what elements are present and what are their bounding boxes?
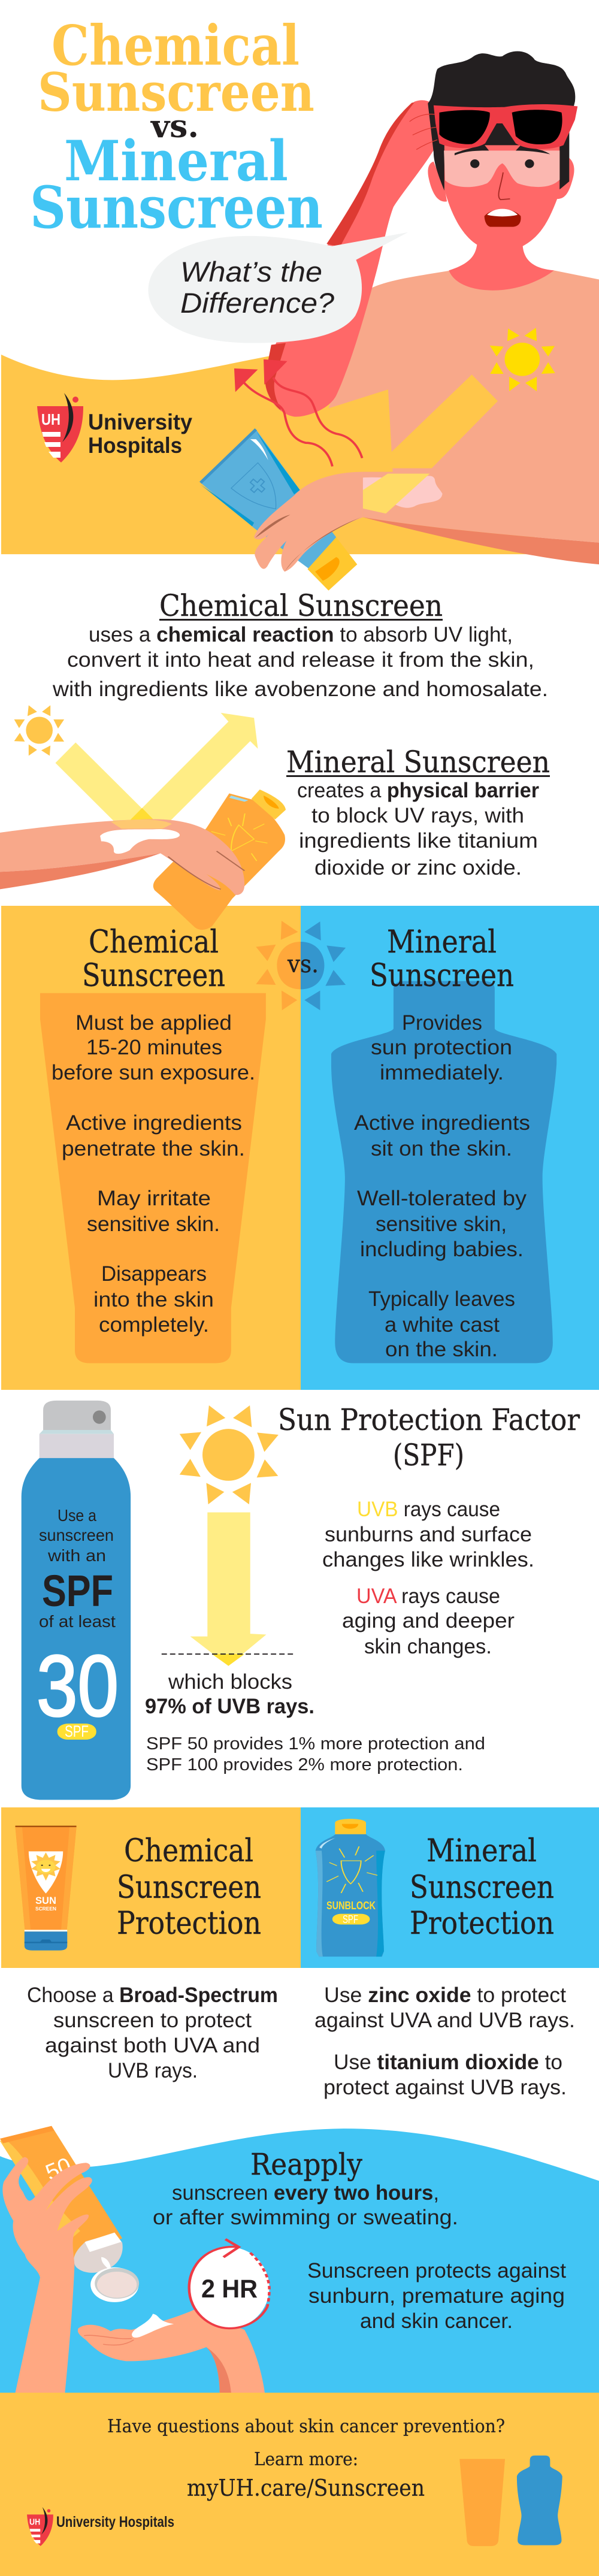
panel background: mineral bbox=[301, 906, 599, 1390]
title line: Sunscreen: Sunscreen bbox=[30, 174, 323, 241]
heading: chemical protection: Chemical bbox=[124, 1833, 253, 1869]
chemical facts: completely. bbox=[99, 1313, 209, 1337]
palm creases bbox=[84, 2335, 134, 2345]
incoming ray bbox=[55, 742, 162, 829]
white cream on arm bbox=[100, 829, 180, 854]
chemical facts: Must be applied bbox=[75, 1011, 232, 1035]
cream in palm bbox=[132, 2314, 174, 2338]
sun on chest bbox=[490, 328, 555, 391]
mineral definition text bbox=[297, 779, 539, 879]
UVB text bbox=[322, 1498, 534, 1571]
ears bbox=[428, 158, 574, 202]
title line: Chemical: Chemical bbox=[52, 13, 300, 78]
UVB arrow bbox=[190, 1512, 267, 1666]
can text: sunscreen bbox=[39, 1526, 114, 1544]
panel background: chemical bbox=[1, 906, 301, 1390]
panel background: mineral protection bbox=[301, 1807, 599, 1968]
upper hand bbox=[2, 2157, 92, 2393]
clock label: 2 HR bbox=[201, 2275, 258, 2303]
UVA text bbox=[342, 1585, 515, 1658]
blue sunscreen tube bbox=[201, 430, 357, 591]
logo crescent bbox=[62, 393, 73, 442]
cream patch on arm bbox=[347, 476, 443, 508]
title bbox=[30, 13, 323, 241]
SPF comparison note bbox=[146, 1734, 485, 1774]
protection benefits text: Sunscreen protects against bbox=[307, 2259, 566, 2282]
chemical facts: May irritate bbox=[97, 1187, 211, 1210]
mineral facts: Provides bbox=[402, 1011, 482, 1035]
titanium dioxide advice bbox=[323, 2051, 567, 2099]
mineral facts: sun protection bbox=[371, 1036, 512, 1059]
reapply illustration bbox=[2, 2157, 270, 2393]
UVB text: UVB rays cause bbox=[357, 1498, 500, 1521]
speech bubble bbox=[148, 232, 408, 343]
chemical facts: 15-20 minutes bbox=[86, 1036, 222, 1059]
heading: mineral protection: Mineral bbox=[426, 1833, 537, 1869]
mineral facts: sit on the skin. bbox=[371, 1137, 512, 1160]
tube cap and lid bbox=[74, 2233, 139, 2302]
arm shadow bbox=[0, 853, 161, 889]
speech bubble text bbox=[180, 256, 334, 319]
eyes bbox=[470, 159, 534, 168]
titanium dioxide advice: Use titanium dioxide to bbox=[334, 2051, 562, 2074]
UVA text: UVA rays cause bbox=[356, 1585, 500, 1608]
can nozzle bbox=[43, 1401, 111, 1431]
chemical definition text: uses a chemical reaction to absorb UV light, bbox=[89, 623, 513, 646]
chemical protection advice: Choose a Broad-Spectrum bbox=[27, 1984, 278, 2007]
mineral facts: on the skin. bbox=[385, 1338, 498, 1361]
barrier dashed line bbox=[162, 1653, 296, 1655]
protection benefits text bbox=[307, 2259, 566, 2333]
blue bottle icon bbox=[316, 1819, 385, 1957]
footer logo wordmark: University Hospitals bbox=[56, 2514, 174, 2530]
lower hand bbox=[78, 2309, 265, 2393]
zinc oxide advice bbox=[314, 1984, 575, 2032]
logo shield bbox=[37, 406, 83, 462]
heading: mineral sunscreen: Sunscreen bbox=[370, 958, 514, 994]
mineral facts bbox=[354, 1011, 530, 1361]
comparison shapes bbox=[40, 921, 556, 1363]
chemical protection advice: sunscreen to protect bbox=[53, 2009, 252, 2032]
orange tube icon bbox=[16, 1825, 77, 1951]
tube label text bbox=[35, 1895, 56, 1912]
blocks text: 97% of UVB rays. bbox=[145, 1695, 314, 1718]
blocks text bbox=[145, 1670, 314, 1718]
footer question: Have questions about skin cancer prevention? bbox=[107, 2416, 505, 2437]
heading: mineral protection bbox=[410, 1833, 554, 1942]
heading: mineral protection: Protection bbox=[410, 1906, 554, 1942]
chemical facts bbox=[52, 1011, 255, 1337]
blocks text: which blocks bbox=[168, 1670, 292, 1694]
zinc oxide advice: Use zinc oxide to protect bbox=[324, 1984, 566, 2007]
sunlight beam bbox=[390, 374, 498, 468]
tube silhouette bbox=[40, 993, 266, 1363]
mineral facts: sensitive skin, bbox=[376, 1213, 507, 1236]
spf pill bbox=[58, 1724, 96, 1740]
heading: chemical sunscreen: Chemical bbox=[89, 924, 219, 960]
arm and hand bbox=[0, 819, 244, 895]
heading: mineral sunscreen: Mineral bbox=[387, 924, 497, 960]
heading: mineral protection: Sunscreen bbox=[410, 1870, 554, 1906]
bottle label text bbox=[326, 1900, 376, 1925]
logo wordmark bbox=[88, 410, 192, 458]
can text: of at least bbox=[39, 1612, 116, 1631]
UVB text: changes like wrinkles. bbox=[322, 1548, 534, 1571]
UVA text: aging and deeper bbox=[342, 1609, 515, 1632]
sun icon bbox=[14, 705, 64, 756]
heading: chemical sunscreen definition: Chemical Sunscreen bbox=[159, 588, 443, 623]
forearm shadow bbox=[206, 2347, 231, 2393]
panel: hero illustration bbox=[1, 51, 599, 591]
can neck bbox=[40, 1434, 114, 1459]
can text: Use a bbox=[58, 1506, 96, 1525]
hair bbox=[428, 51, 575, 191]
orange bottle bbox=[153, 790, 286, 930]
tube number: 50 bbox=[42, 2153, 75, 2186]
website address: myUH.care/Sunscreen bbox=[187, 2475, 425, 2501]
heading: mineral sunscreen definition: Mineral Sunscreen bbox=[286, 745, 550, 779]
chemical facts: sensitive skin. bbox=[87, 1213, 220, 1236]
mineral facts: Active ingredients bbox=[354, 1111, 530, 1135]
can ring bbox=[40, 1430, 114, 1434]
raised arm shadow bbox=[265, 102, 415, 410]
mineral facts: immediately. bbox=[380, 1061, 504, 1084]
vs sun: blue half bbox=[301, 921, 346, 1010]
panel: definitions bbox=[0, 588, 550, 930]
man's torso and lower arm bbox=[328, 270, 599, 543]
finger creases bbox=[410, 114, 437, 150]
learn more: Learn more: bbox=[254, 2449, 358, 2470]
title line: Sunscreen: Sunscreen bbox=[38, 61, 314, 123]
SPF heading bbox=[278, 1402, 580, 1473]
tube label text: SCREEN bbox=[35, 1906, 56, 1912]
UVA text: skin changes. bbox=[364, 1635, 492, 1658]
pale sunglass tan mark bbox=[444, 150, 559, 187]
UVB text: sunburns and surface bbox=[325, 1523, 532, 1546]
heading: mineral sunscreen bbox=[370, 924, 514, 994]
can text: with an bbox=[47, 1546, 106, 1565]
mineral facts: including babies. bbox=[360, 1238, 524, 1261]
chemical protection advice: against both UVA and bbox=[45, 2034, 260, 2057]
chemical definition text: with ingredients like avobenzone and homosalate. bbox=[52, 678, 548, 701]
heading: chemical sunscreen bbox=[82, 924, 225, 994]
vs sun: orange half bbox=[256, 921, 301, 1010]
titanium dioxide advice: protect against UVB rays. bbox=[323, 2076, 567, 2099]
mineral facts: Typically leaves bbox=[368, 1287, 515, 1311]
red heat arrows bbox=[234, 359, 362, 467]
mineral definition text: to block UV rays, with bbox=[311, 804, 524, 827]
can text: SPF bbox=[65, 1722, 89, 1740]
blue wave background bbox=[0, 2128, 599, 2393]
protection benefits text: sunburn, premature aging bbox=[308, 2284, 565, 2308]
eyebrows bbox=[455, 143, 550, 155]
nose bbox=[498, 173, 510, 199]
panel: sun protection factor bbox=[22, 1401, 580, 1800]
bottle label text: SPF bbox=[343, 1913, 358, 1925]
heading: chemical protection: Protection bbox=[117, 1906, 261, 1942]
SPF comparison note: SPF 100 provides 2% more protection. bbox=[146, 1755, 463, 1774]
panel: comparison bbox=[1, 906, 599, 1390]
mineral definition text: ingredients like titanium bbox=[299, 829, 538, 852]
footer logo: UH bbox=[29, 2518, 40, 2527]
logo stripes bbox=[42, 432, 60, 458]
title line: Mineral: Mineral bbox=[64, 128, 288, 193]
logo letters: UH bbox=[41, 410, 60, 428]
chemical facts: Disappears bbox=[101, 1262, 207, 1286]
panel: footer bbox=[0, 2393, 599, 2576]
heading: chemical protection: Sunscreen bbox=[117, 1870, 261, 1906]
chemical definition text bbox=[52, 623, 548, 701]
two hour clock bbox=[189, 2239, 270, 2329]
mouth bbox=[485, 209, 521, 227]
ray overlap bbox=[122, 808, 162, 829]
yellow wave background bbox=[1, 341, 535, 554]
spray can bbox=[22, 1401, 131, 1800]
protection benefits text: and skin cancer. bbox=[360, 2309, 513, 2333]
can body bbox=[22, 1458, 131, 1800]
sunglass lenses bbox=[439, 110, 562, 144]
panel: reapply bbox=[0, 2126, 599, 2393]
sunlight absorbed on arm bbox=[342, 474, 429, 513]
side hair bbox=[434, 125, 569, 191]
raised arm bbox=[265, 100, 438, 417]
can text bbox=[37, 1506, 119, 1740]
footer background bbox=[0, 2393, 599, 2576]
logo dot bbox=[72, 397, 78, 403]
footer logo bbox=[27, 2507, 53, 2546]
bottle silhouette bbox=[331, 981, 556, 1363]
sun icon bbox=[180, 1405, 279, 1504]
reapply text: or after swimming or sweating. bbox=[153, 2206, 458, 2229]
neck and collar bbox=[449, 240, 554, 291]
reapply heading: Reapply bbox=[250, 2147, 363, 2182]
vs label: vs. bbox=[287, 951, 319, 978]
reflection illustration bbox=[0, 705, 286, 930]
heading: chemical sunscreen: Sunscreen bbox=[82, 958, 225, 994]
sun and arrow graphic bbox=[162, 1405, 296, 1666]
chemical facts: before sun exposure. bbox=[52, 1061, 255, 1084]
face bbox=[444, 145, 559, 250]
chemical facts: penetrate the skin. bbox=[62, 1137, 245, 1160]
University Hospitals logo bbox=[37, 393, 83, 462]
finger lines bbox=[168, 851, 244, 889]
reflected ray arrow bbox=[122, 713, 258, 829]
SPF heading: (SPF) bbox=[393, 1438, 464, 1473]
zinc oxide advice: against UVA and UVB rays. bbox=[314, 2009, 575, 2032]
teeth bbox=[487, 209, 518, 216]
panel background: chemical protection bbox=[1, 1807, 301, 1968]
can text: 30 bbox=[37, 1637, 119, 1734]
speech bubble text: Difference? bbox=[180, 287, 334, 319]
title line: vs.: vs. bbox=[150, 108, 199, 145]
SPF comparison note: SPF 50 provides 1% more protection and bbox=[146, 1734, 485, 1753]
mineral definition text: dioxide or zinc oxide. bbox=[314, 856, 522, 879]
reapply text: sunscreen every two hours, bbox=[172, 2181, 439, 2205]
lower arm shadow bbox=[363, 517, 599, 564]
ray glow on arm bbox=[111, 820, 172, 829]
sunscreen tube bbox=[0, 2126, 122, 2258]
man's head bbox=[410, 51, 577, 291]
can text: SPF bbox=[42, 1566, 113, 1616]
hand holding tube bbox=[254, 472, 363, 572]
logo wordmark: University bbox=[88, 410, 192, 434]
mineral facts: a white cast bbox=[385, 1313, 500, 1337]
chemical facts: Active ingredients bbox=[66, 1111, 242, 1135]
panel: protection bbox=[1, 1807, 599, 2099]
chemical definition text: convert it into heat and release it from the skin, bbox=[67, 648, 534, 672]
nozzle hole bbox=[93, 1410, 106, 1424]
chemical facts: into the skin bbox=[93, 1288, 214, 1311]
heading: chemical protection bbox=[117, 1833, 261, 1942]
bottle label text: SUNBLOCK bbox=[326, 1900, 376, 1912]
tube label text: SUN bbox=[35, 1895, 56, 1906]
logo wordmark: Hospitals bbox=[88, 433, 182, 458]
tube and bottle silhouettes bbox=[459, 2456, 562, 2546]
arrow tip past barrier bbox=[212, 1654, 244, 1666]
chemical protection advice bbox=[27, 1984, 278, 2082]
chemical protection advice: UVB rays. bbox=[108, 2059, 198, 2082]
red sunglasses frame bbox=[434, 104, 577, 149]
finger shadows bbox=[255, 515, 361, 572]
mineral definition text: creates a physical barrier bbox=[297, 779, 539, 802]
speech bubble text: What’s the bbox=[180, 256, 322, 288]
reapply text bbox=[153, 2181, 458, 2229]
mineral facts: Well-tolerated by bbox=[357, 1187, 527, 1210]
